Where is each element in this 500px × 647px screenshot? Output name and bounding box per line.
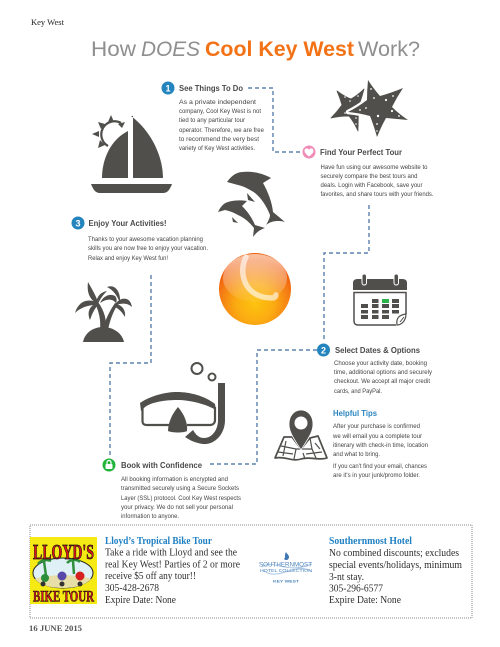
step: select dates and options: cards, and PayPal. <box>334 388 382 395</box>
coupon text: Lloyd's: Expire Date: None <box>105 595 177 606</box>
icon: starfish <box>331 80 408 137</box>
step: find your perfect tour <box>302 146 434 198</box>
step: select dates and options: 2 <box>321 346 326 356</box>
step: enjoy your activities: Enjoy Your Activities! <box>88 219 166 228</box>
logo: orange orb <box>219 253 291 325</box>
helpful tips: are it's in your junk/promo folder. <box>333 472 420 479</box>
step: enjoy your activities <box>72 216 208 262</box>
logo: Southernmost Hotel Collection: SOUTHERNMOST <box>259 562 312 568</box>
logo: Southernmost Hotel Collection: KEY WEST <box>273 578 300 584</box>
step: see things to do: tied to any particular tour <box>179 117 245 124</box>
logo: Lloyd's bike tour <box>30 537 97 606</box>
icon: palm island <box>75 282 132 342</box>
step: see things to do: As a private independent <box>179 99 256 106</box>
helpful tips: itinerary with check-in time, location <box>333 442 428 449</box>
logo: Southernmost Hotel Collection <box>259 552 312 584</box>
coupon text: Lloyd's: real Key West! Parties of 2 or more <box>105 560 241 570</box>
logo: Southernmost Hotel Collection: HOTEL COLLECTION <box>260 568 312 573</box>
icon: calendar <box>353 274 407 325</box>
helpful tips: we will email you a complete tour <box>332 433 422 440</box>
coupon text: Southernmost: 305-296-6577 <box>329 584 383 594</box>
step: book with confidence <box>102 458 241 520</box>
title: Work? <box>358 37 420 61</box>
coupon text: Southernmost: No combined discounts; excludes <box>329 548 459 559</box>
step: book with confidence: Book with Confidence <box>121 461 203 470</box>
step: find your perfect tour: deals. Login with Facebook, save your <box>320 182 422 189</box>
helpful tips: If you can't find your email, chances <box>333 463 427 470</box>
step: find your perfect tour: favorites, and share tours with your friends. <box>320 191 434 198</box>
step: see things to do: company, Cool Key West is not <box>179 108 261 115</box>
helpful tips: and what to bring. <box>333 451 380 458</box>
step: enjoy your activities: 3 <box>75 218 81 228</box>
step: see things to do: See Things To Do <box>179 84 243 93</box>
icon: sailboat and sun <box>91 115 172 193</box>
step: book with confidence: information to anyone. <box>121 513 179 520</box>
title <box>91 37 420 61</box>
step: enjoy your activities: skills you are now free to enjoy your vacation. <box>88 245 208 252</box>
title: DOES <box>141 37 201 61</box>
step: see things to do: to recommend the very best <box>179 136 259 143</box>
icon: map with pin <box>275 410 327 460</box>
step: see things to do: 1 <box>165 84 171 94</box>
coupon panel <box>30 525 472 618</box>
icon: snorkel mask <box>140 363 225 444</box>
step: enjoy your activities: Relax and enjoy Key West fun! <box>88 255 168 262</box>
coupon text: Southernmost: Southernmost Hotel <box>329 536 412 547</box>
logo: Lloyd's bike tour: BIKE TOUR <box>33 588 94 606</box>
step: find your perfect tour: Have fun using our awesome website to <box>320 164 428 171</box>
step: find your perfect tour: securely compare the best tours and <box>320 173 418 180</box>
step: see things to do <box>162 82 264 152</box>
step: select dates and options: Select Dates & Options <box>335 346 421 355</box>
step: book with confidence: your privacy. We do not sell your personal <box>121 504 233 511</box>
coupon text: Lloyd's: Take a ride with Lloyd and see the <box>105 548 238 558</box>
coupon text: Southernmost: 3-nt stay. <box>329 572 364 583</box>
coupon text: Southernmost: special events/holidays, minimum <box>329 560 462 571</box>
step: book with confidence: All booking information is encrypted and <box>121 476 228 483</box>
coupon text: Lloyd's: receive $5 off any tour!! <box>105 571 196 582</box>
icon: dolphins <box>218 172 285 237</box>
title: How <box>91 37 136 61</box>
title: Cool Key West <box>205 37 354 61</box>
step: select dates and options: time, additional options and securely <box>334 369 433 376</box>
helpful tips <box>332 409 428 479</box>
dashed route connectors <box>110 88 369 464</box>
logo: Lloyd's bike tour: LLOYD'S <box>33 540 94 564</box>
step: see things to do: variety of Key West activities. <box>179 145 255 152</box>
coupon text: Southernmost <box>329 536 462 606</box>
step: find your perfect tour: Find Your Perfect Tour <box>320 148 402 157</box>
helpful tips: Helpful Tips <box>333 409 378 418</box>
helpful tips: After your purchase is confirmed <box>333 423 420 430</box>
step: see things to do: operator. Therefore, we are free <box>179 127 264 134</box>
coupon text: Lloyd's <box>105 536 241 606</box>
step: select dates and options: checkout. We accept all major credit <box>334 378 430 385</box>
coupon text: Lloyd's: 305-428-2678 <box>105 583 159 594</box>
step: select dates and options: Choose your activity date, booking <box>334 360 427 367</box>
step: book with confidence: Layer (SSL) protocol. Cool Key West respects <box>121 495 241 502</box>
step: book with confidence: transmitted securely using a Secure Sockets <box>121 485 239 492</box>
page footer: 16 JUNE 2015 <box>29 623 82 633</box>
coupon text: Southernmost: Expire Date: None <box>329 595 402 606</box>
running header: Key West <box>31 17 65 27</box>
coupon text: Lloyd's: Lloyd’s Tropical Bike Tour <box>105 536 213 547</box>
step: select dates and options <box>317 344 433 395</box>
step: enjoy your activities: Thanks to your awesome vacation planning <box>88 236 203 243</box>
